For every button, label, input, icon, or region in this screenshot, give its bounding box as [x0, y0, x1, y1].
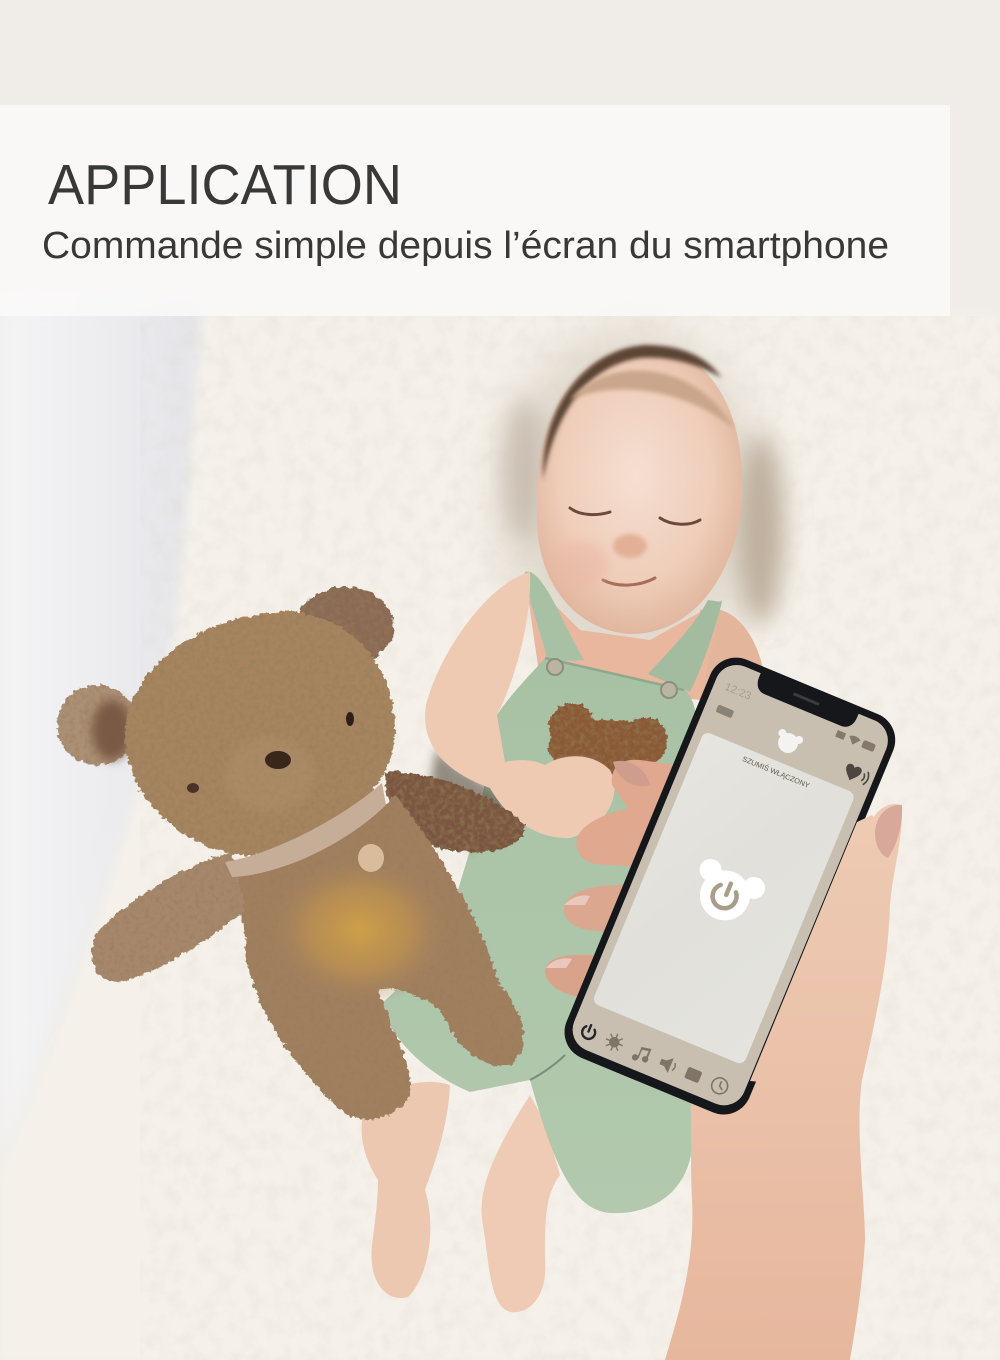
heart and sound icon	[842, 763, 871, 787]
notch	[754, 671, 859, 730]
power bear button	[684, 856, 768, 932]
music note icon	[631, 1043, 653, 1065]
baby legs and feet	[362, 1082, 560, 1312]
arm shadow	[430, 750, 510, 850]
sun icon	[603, 1030, 626, 1054]
header background panel	[0, 105, 950, 316]
smartphone	[556, 649, 904, 1123]
moon icon	[684, 1067, 703, 1083]
baby chest	[525, 575, 722, 700]
phone screen	[566, 658, 895, 1112]
blanket background	[0, 300, 1000, 1360]
teddy left arm	[92, 852, 245, 982]
small bear logo	[772, 728, 804, 757]
teddy scarf	[225, 783, 386, 877]
phone body	[556, 649, 904, 1123]
hand	[545, 760, 902, 1360]
title: APPLICATION	[48, 153, 402, 217]
finger nails	[613, 761, 650, 786]
bottom menu icons	[579, 1021, 730, 1097]
thumb nail	[875, 805, 902, 858]
baby head	[537, 345, 742, 634]
index finger	[576, 760, 700, 870]
teddy heart	[358, 844, 384, 872]
speaker icon	[657, 1054, 678, 1075]
clock icon	[709, 1075, 730, 1096]
light panel	[592, 731, 856, 1065]
baby left arm	[425, 572, 614, 838]
baby hair	[543, 345, 722, 480]
teddy body	[235, 795, 524, 1119]
teddy right ear	[296, 587, 394, 665]
battery icon	[715, 704, 734, 718]
thumb over phone edge	[750, 805, 902, 1085]
time: 12:23	[723, 681, 753, 703]
status icons	[835, 729, 876, 753]
status text: SZUMIŚ WŁĄCZONY	[741, 754, 811, 790]
teddy left ear	[57, 685, 137, 765]
teddy tummy glow	[268, 855, 452, 1005]
middle finger	[564, 885, 650, 935]
baby right shoulder	[700, 608, 765, 720]
teddy right arm	[385, 772, 525, 853]
ring finger	[545, 955, 615, 998]
teddy eyes and nose	[187, 712, 354, 813]
teddy bear	[57, 587, 525, 1119]
teddy head	[125, 612, 395, 856]
romper	[380, 572, 722, 1213]
bear patch on romper	[548, 703, 668, 776]
baby cheeks	[552, 541, 608, 589]
palm and wrist	[665, 804, 902, 1360]
subtitle: Commande simple depuis l’écran du smartphone	[42, 225, 889, 267]
baby closed eyes	[570, 508, 610, 515]
speaker	[793, 692, 820, 706]
header band	[0, 105, 950, 316]
baby nose	[613, 534, 647, 558]
baby mouth	[603, 578, 655, 585]
power icon	[580, 1023, 598, 1041]
baby	[362, 345, 765, 1312]
